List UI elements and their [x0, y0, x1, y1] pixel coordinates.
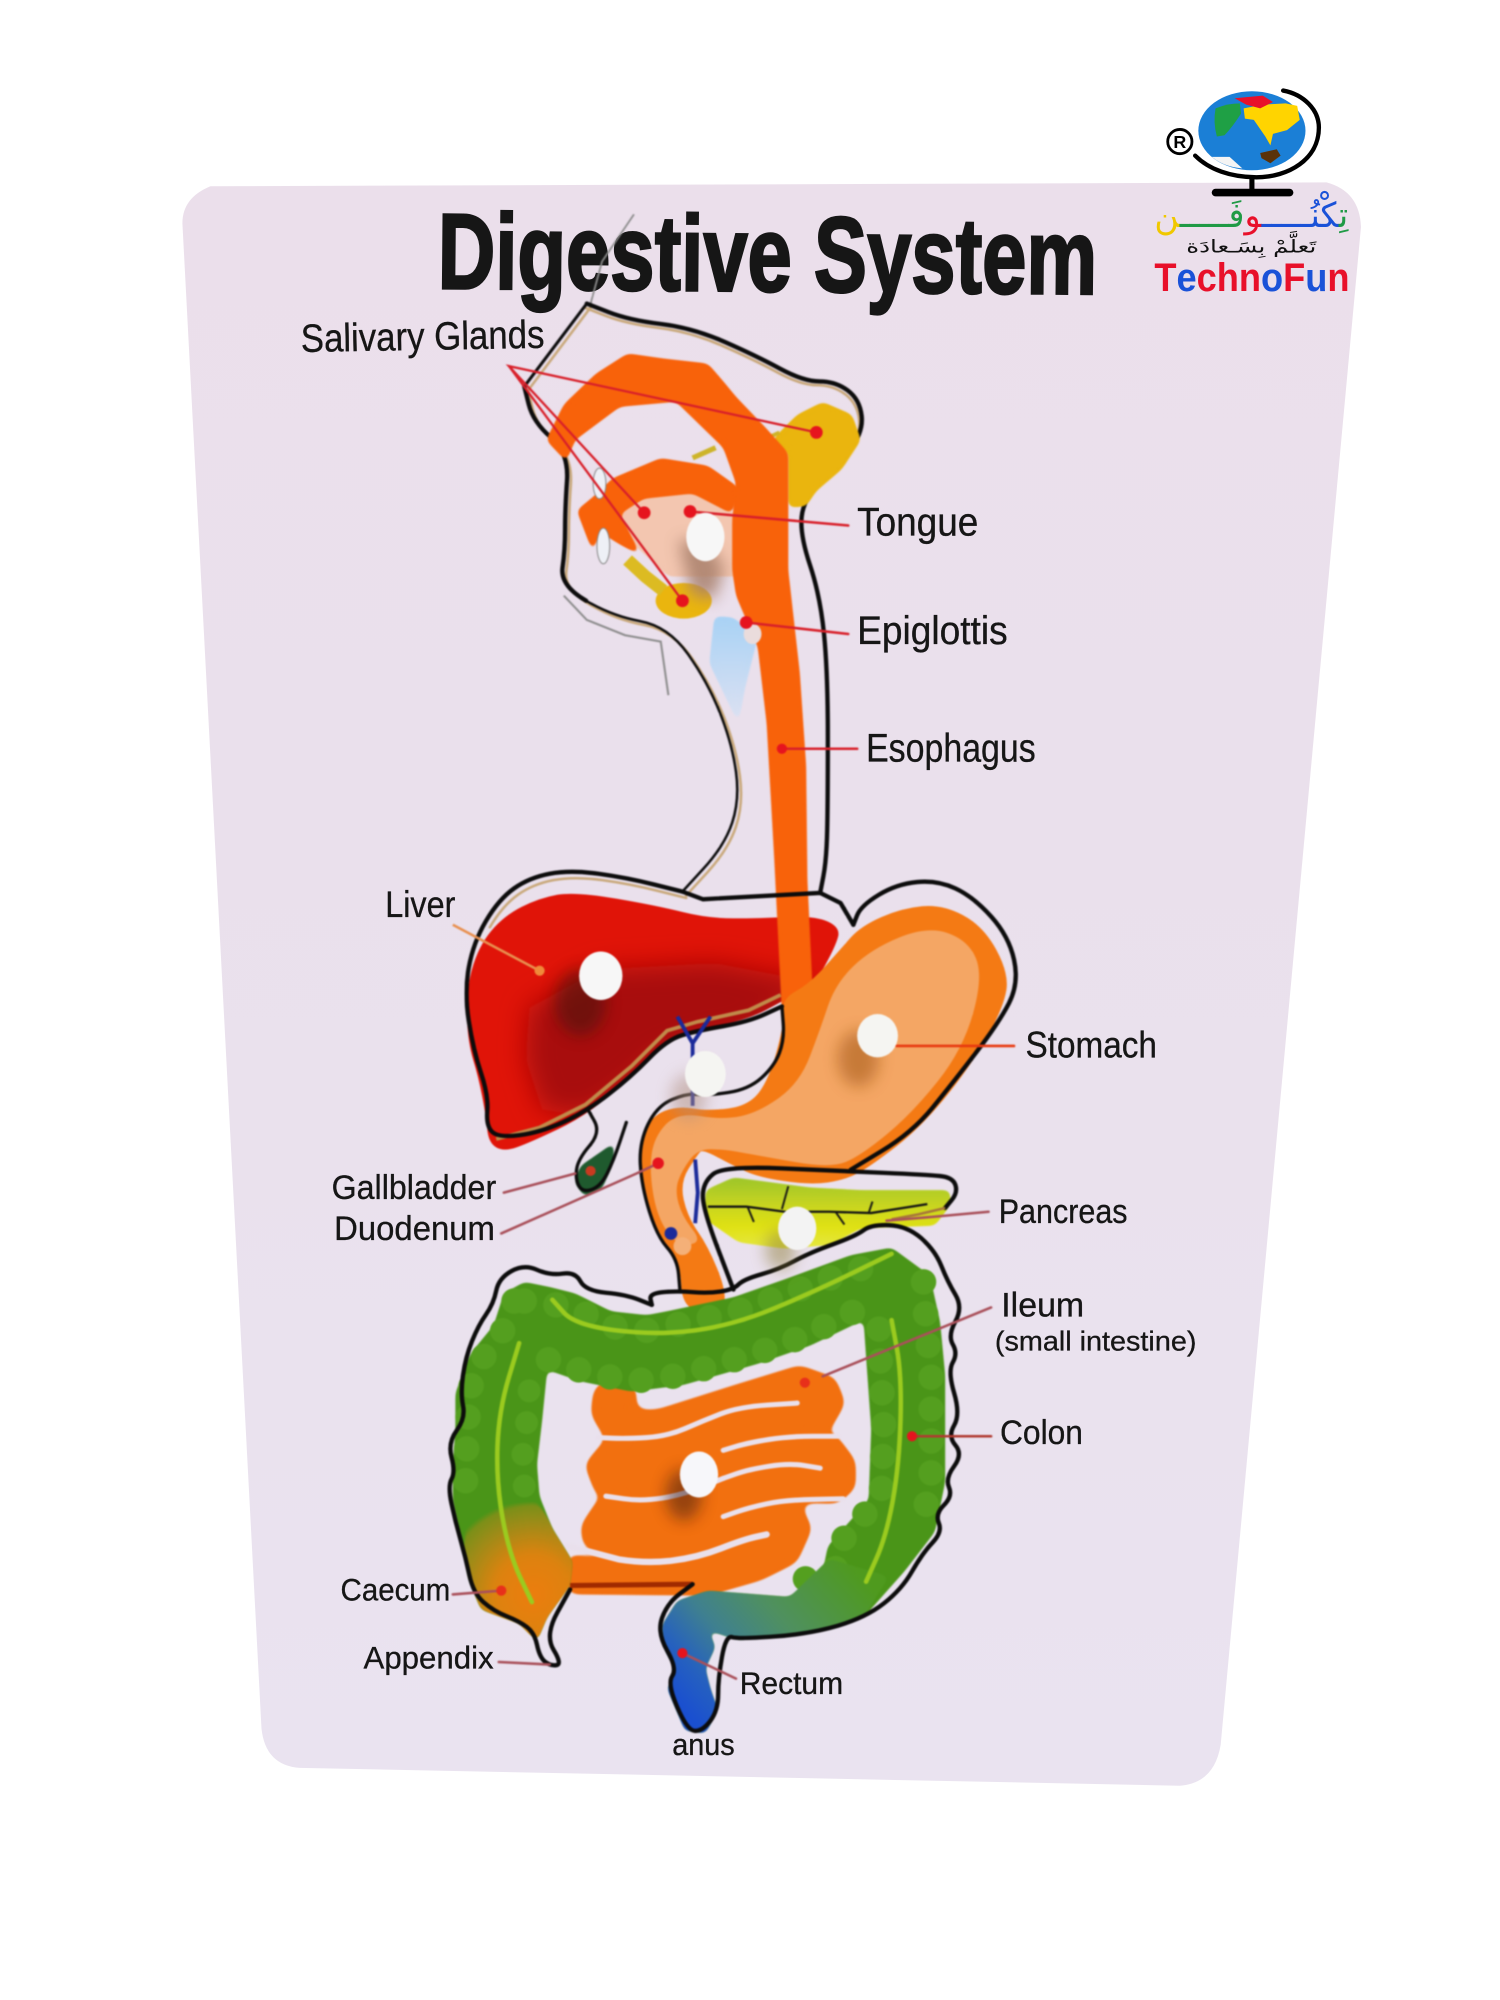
- epiglottis tip: [744, 624, 761, 644]
- labels: [300, 313, 1196, 1762]
- label: tongue: Tongue: [857, 501, 978, 545]
- label: liver: Liver: [385, 884, 455, 925]
- gallbladder: [574, 1110, 626, 1196]
- arabic brand name: تِكْنُـــــوفَـــــن: [1154, 190, 1349, 236]
- label: epiglottis: Epiglottis: [857, 609, 1008, 653]
- icon: globe: [1195, 91, 1319, 196]
- label: esophagus: Esophagus: [866, 726, 1036, 770]
- label: ileum: Ileum: [1001, 1286, 1084, 1324]
- registered mark: [1168, 129, 1192, 154]
- pancreas: [703, 1168, 956, 1290]
- liver outline: [467, 872, 853, 1136]
- label: gallbladder: Gallbladder: [332, 1169, 496, 1207]
- pointer lines and dots: [453, 366, 1014, 1679]
- TechnoFun logo: [1154, 91, 1349, 300]
- label: pancreas: Pancreas: [999, 1193, 1128, 1231]
- salivary glands: [628, 402, 861, 619]
- teeth: [593, 468, 610, 564]
- label: caecum: Caecum: [341, 1572, 450, 1608]
- label: salivary glands: Salivary Glands: [300, 313, 545, 361]
- puzzle knobs: [555, 513, 898, 1520]
- label: colon: Colon: [1000, 1414, 1083, 1452]
- label: rectum: Rectum: [740, 1665, 843, 1701]
- epiglottis: [709, 616, 758, 724]
- registered mark: R: [1173, 132, 1186, 152]
- label: appendix: Appendix: [364, 1639, 494, 1675]
- small intestine / ileum: [568, 1365, 856, 1596]
- stomach outline: [851, 882, 1016, 1170]
- arabic tagline: تَعلَّمْ بِسَـعادَة: [1186, 230, 1317, 259]
- inner stomach curve outline: [640, 1006, 783, 1290]
- label: stomach: Stomach: [1026, 1024, 1157, 1065]
- oral cavity arch: [577, 458, 739, 556]
- esophagus and pharynx: [546, 353, 812, 1014]
- stomach inner lining: [651, 930, 979, 1244]
- stomach and duodenum wall: [640, 906, 1007, 1311]
- bile ducts: [666, 1017, 710, 1255]
- colon: [450, 1225, 959, 1733]
- liver: [467, 894, 838, 1150]
- label: anus: anus: [672, 1728, 735, 1762]
- brand wordmark: TechnoFun: [1154, 256, 1349, 300]
- label: small intestine: (small intestine): [995, 1326, 1196, 1357]
- label: duodenum: Duodenum: [334, 1210, 495, 1248]
- wooden puzzle board: [182, 182, 1361, 1786]
- anatomy diagram: [450, 214, 1016, 1733]
- title: Digestive System: [437, 191, 1098, 317]
- head and neck cut-out outline: [524, 214, 862, 895]
- tongue: [617, 491, 740, 599]
